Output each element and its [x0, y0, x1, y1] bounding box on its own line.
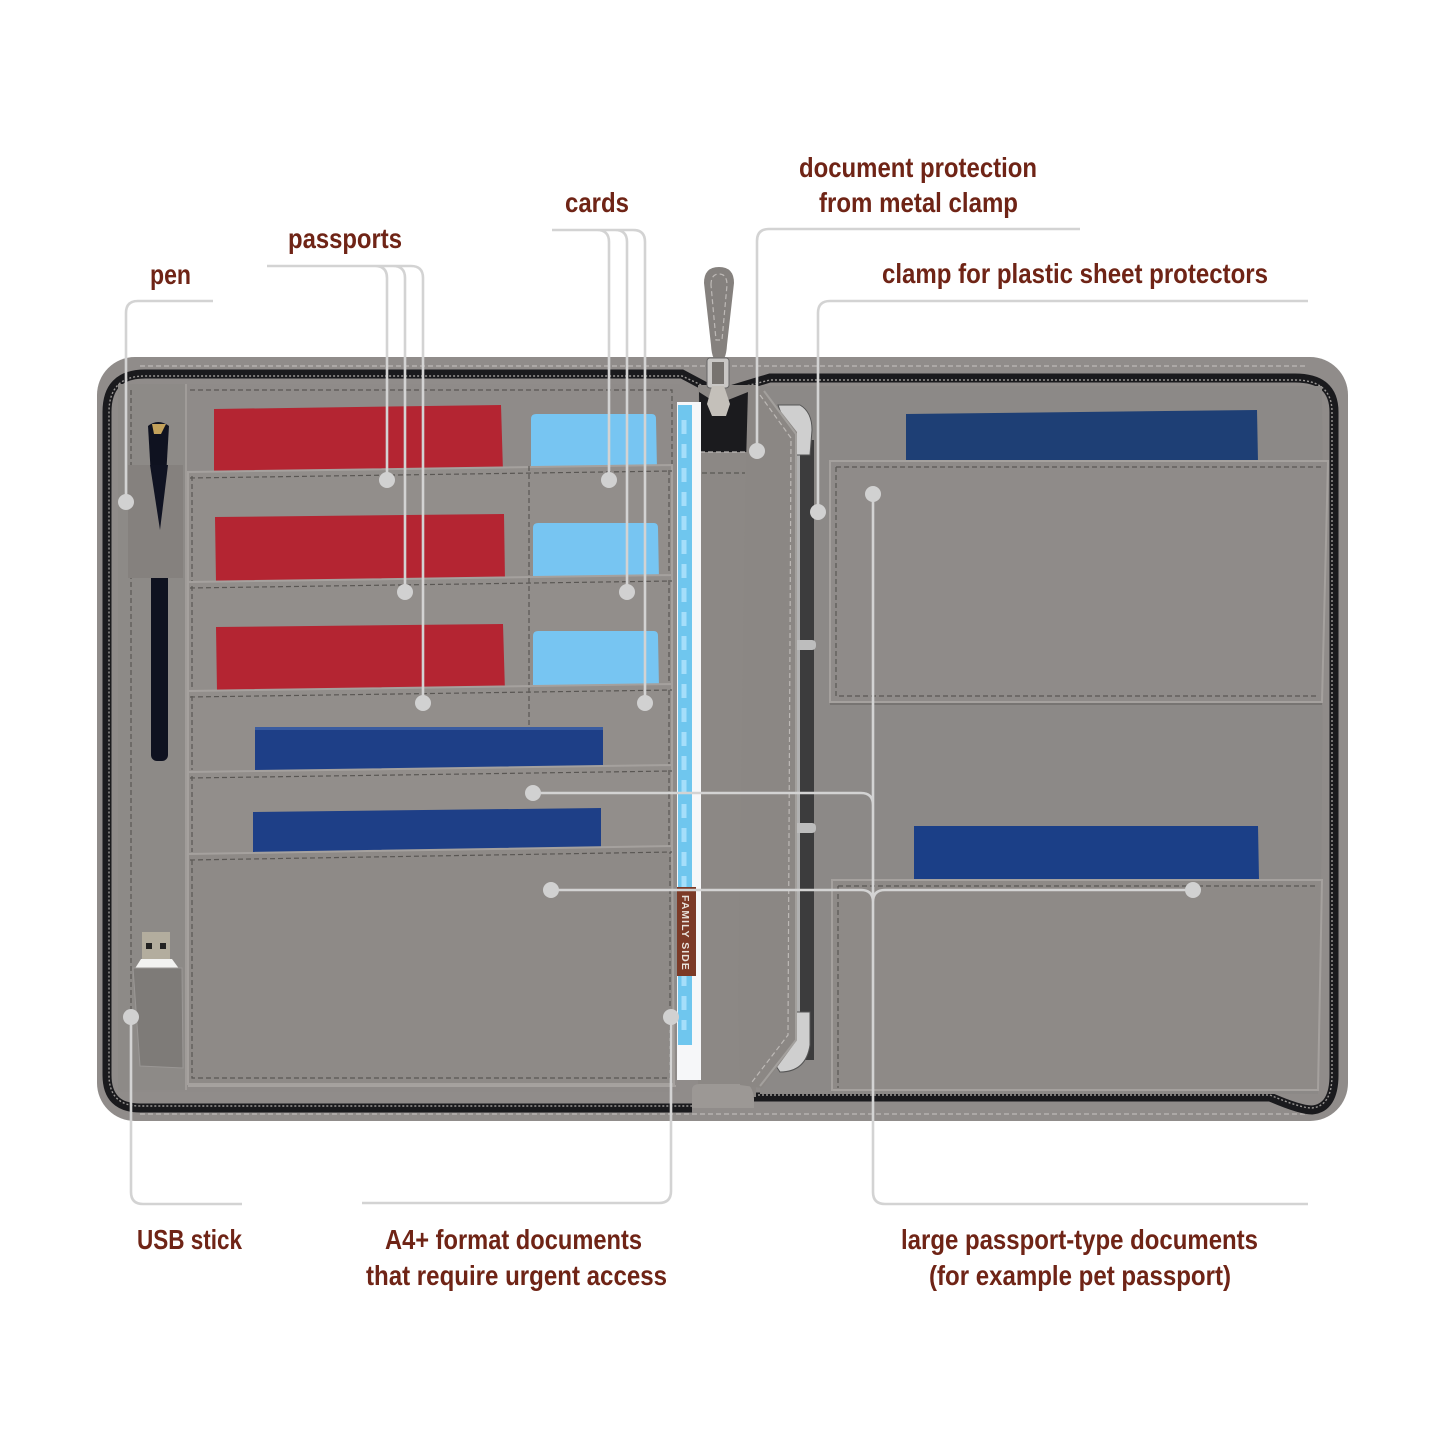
label: large passport documents: (for example pet passport)	[929, 1260, 1231, 1291]
callout line: document protection	[749, 229, 1080, 459]
zipper track	[107, 374, 1334, 1110]
pocket row 2	[188, 575, 672, 695]
outer cover	[97, 357, 1348, 1121]
organizer	[97, 267, 1348, 1121]
label: passports: passports	[288, 223, 402, 254]
passport and card row 1	[214, 405, 657, 472]
label: document protection: from metal clamp	[819, 187, 1018, 218]
family side tag	[677, 887, 696, 976]
callout line: a4 documents	[362, 1009, 679, 1203]
right lower pocket	[832, 880, 1322, 1090]
pocket row 5	[188, 846, 676, 1086]
label: a4 documents	[366, 1224, 667, 1291]
usb stick	[133, 932, 183, 1068]
label: a4 documents: that require urgent access	[366, 1260, 667, 1291]
label: usb stick: USB stick	[137, 1224, 242, 1255]
callout line: cards	[552, 230, 653, 711]
right upper pocket	[830, 461, 1328, 704]
pen strip	[118, 384, 186, 1090]
callout line: large passport documents	[525, 486, 1308, 1204]
label: pen: pen	[150, 259, 191, 290]
cover rim stitching	[140, 366, 1305, 1114]
binder mechanism	[772, 405, 816, 1072]
protective flap	[738, 390, 797, 1088]
pocket back wall stitching	[190, 390, 672, 465]
callout line: passports	[267, 266, 431, 711]
pocket row 1	[188, 465, 672, 585]
callout lines and dots	[118, 229, 1308, 1204]
callout line: clamp	[810, 301, 1308, 520]
label: large passport documents	[901, 1224, 1258, 1291]
right inner panel	[760, 386, 1323, 1094]
label: a4 documents: A4+ format documents	[385, 1224, 642, 1255]
spine area	[692, 385, 756, 1108]
label: clamp: clamp for plastic sheet protectors	[882, 258, 1268, 289]
label: cards: cards	[565, 187, 629, 218]
left inner panel	[118, 384, 680, 1092]
passport and card row 2	[215, 514, 659, 582]
label: large passport documents: large passport-type documents	[901, 1224, 1258, 1255]
passport and card row 3	[216, 624, 659, 692]
blue document right top	[906, 410, 1258, 462]
blue document left 2	[253, 808, 601, 855]
document sheet	[677, 402, 701, 1080]
callout line: usb stick	[123, 1009, 242, 1204]
pocket row 3	[188, 684, 672, 772]
pocket row 4	[188, 765, 672, 855]
blue document left 1	[255, 727, 603, 774]
label: document protection: document protection	[799, 152, 1037, 183]
blue document right bottom	[914, 826, 1259, 880]
pen	[128, 422, 183, 761]
zipper pull tab	[704, 267, 734, 416]
label: document protection	[799, 152, 1037, 218]
callout line: pen	[118, 301, 213, 510]
family side tag: FAMILY SIDE	[679, 895, 691, 971]
